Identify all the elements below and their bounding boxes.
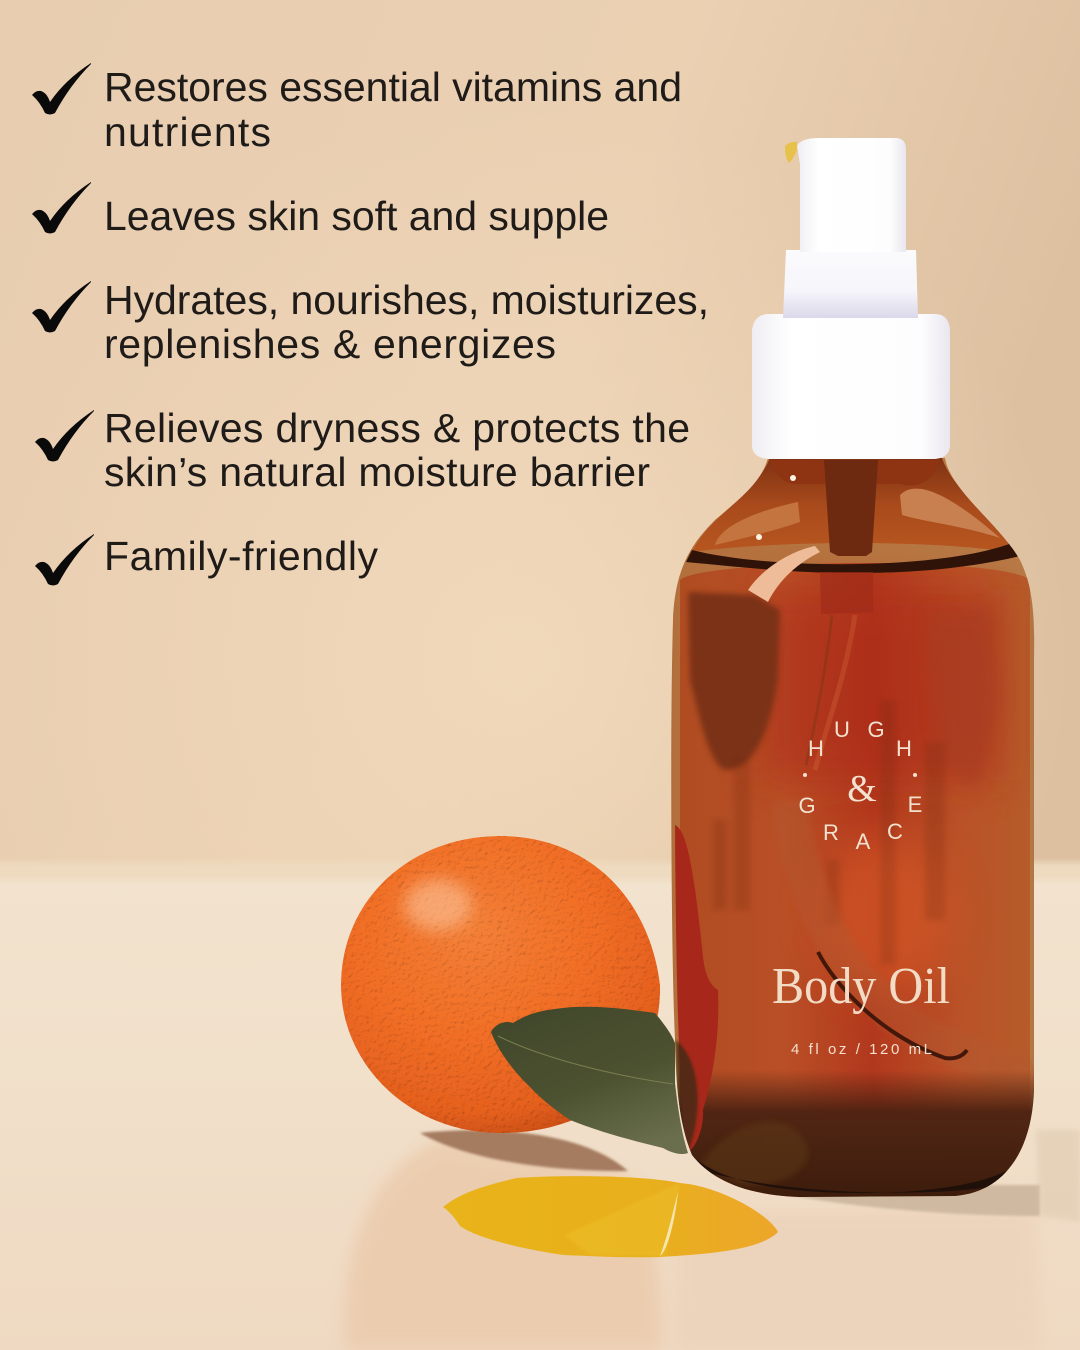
brand mark: H bbox=[896, 736, 912, 761]
benefit 1 bbox=[32, 63, 682, 155]
benefit 5 bbox=[35, 533, 378, 586]
orange shadow bbox=[420, 1130, 628, 1171]
dark reflection left bbox=[688, 592, 780, 770]
benefit 1 text: Restores essential vitamins and bbox=[104, 64, 682, 110]
benefit 3 text: Hydrates, nourishes, moisturizes, bbox=[104, 277, 709, 323]
bottle bbox=[665, 138, 1040, 1200]
brand mark: H bbox=[808, 736, 824, 761]
left red strip bbox=[675, 825, 718, 1152]
brand mark: U bbox=[834, 717, 850, 742]
brand mark: E bbox=[908, 792, 922, 817]
benefit 5 text: Family-friendly bbox=[104, 533, 378, 579]
dark reflection right bbox=[958, 622, 984, 772]
brand mark: G bbox=[867, 717, 885, 742]
icon: check bbox=[32, 63, 91, 114]
brand mark: G bbox=[798, 793, 816, 818]
pump nozzle bbox=[785, 142, 797, 163]
benefit 2 text: Leaves skin soft and supple bbox=[104, 193, 609, 239]
pump head bbox=[797, 138, 906, 252]
table surface bbox=[0, 862, 1080, 1350]
benefit 3 bbox=[32, 277, 709, 367]
swoosh highlight bbox=[748, 546, 820, 602]
volume: 4 fl oz / 120 mL bbox=[791, 1041, 932, 1058]
leaf bbox=[491, 1007, 688, 1154]
liquid bbox=[680, 563, 1030, 1120]
benefit 4 text: skin’s natural moisture barrier bbox=[104, 449, 650, 495]
bottle body bbox=[665, 455, 1040, 1200]
oil puddle bbox=[443, 1176, 778, 1257]
benefit 2 bbox=[32, 182, 609, 239]
dip tube bbox=[824, 460, 878, 556]
benefit 4 bbox=[35, 405, 690, 495]
tube refraction bbox=[830, 908, 1034, 1096]
shoulder glass bbox=[692, 458, 1015, 552]
ghost text columns bbox=[720, 700, 935, 965]
brand mark: & bbox=[847, 768, 877, 810]
icon: check bbox=[32, 182, 91, 234]
benefit 1 text: nutrients bbox=[104, 109, 271, 155]
oil line bbox=[686, 543, 1020, 573]
brand mark bbox=[798, 717, 922, 854]
bottle label bbox=[772, 717, 950, 1058]
product name: Body Oil bbox=[772, 958, 950, 1015]
benefit 4 text: Relieves dryness & protects the bbox=[104, 405, 690, 451]
benefit 3 text: replenishes & energizes bbox=[104, 321, 556, 367]
icon: check bbox=[35, 534, 94, 586]
background wall bbox=[0, 0, 1080, 880]
brand mark: C bbox=[887, 819, 903, 844]
bottom dark area bbox=[665, 1070, 1040, 1200]
icon: check bbox=[35, 410, 94, 462]
pump neck bbox=[783, 250, 918, 318]
icon: check bbox=[32, 281, 91, 332]
brand mark: R bbox=[823, 820, 839, 845]
brand mark: A bbox=[856, 829, 871, 854]
orange fruit bbox=[341, 836, 660, 1133]
benefit list bbox=[32, 63, 709, 586]
pump collar bbox=[752, 314, 950, 459]
